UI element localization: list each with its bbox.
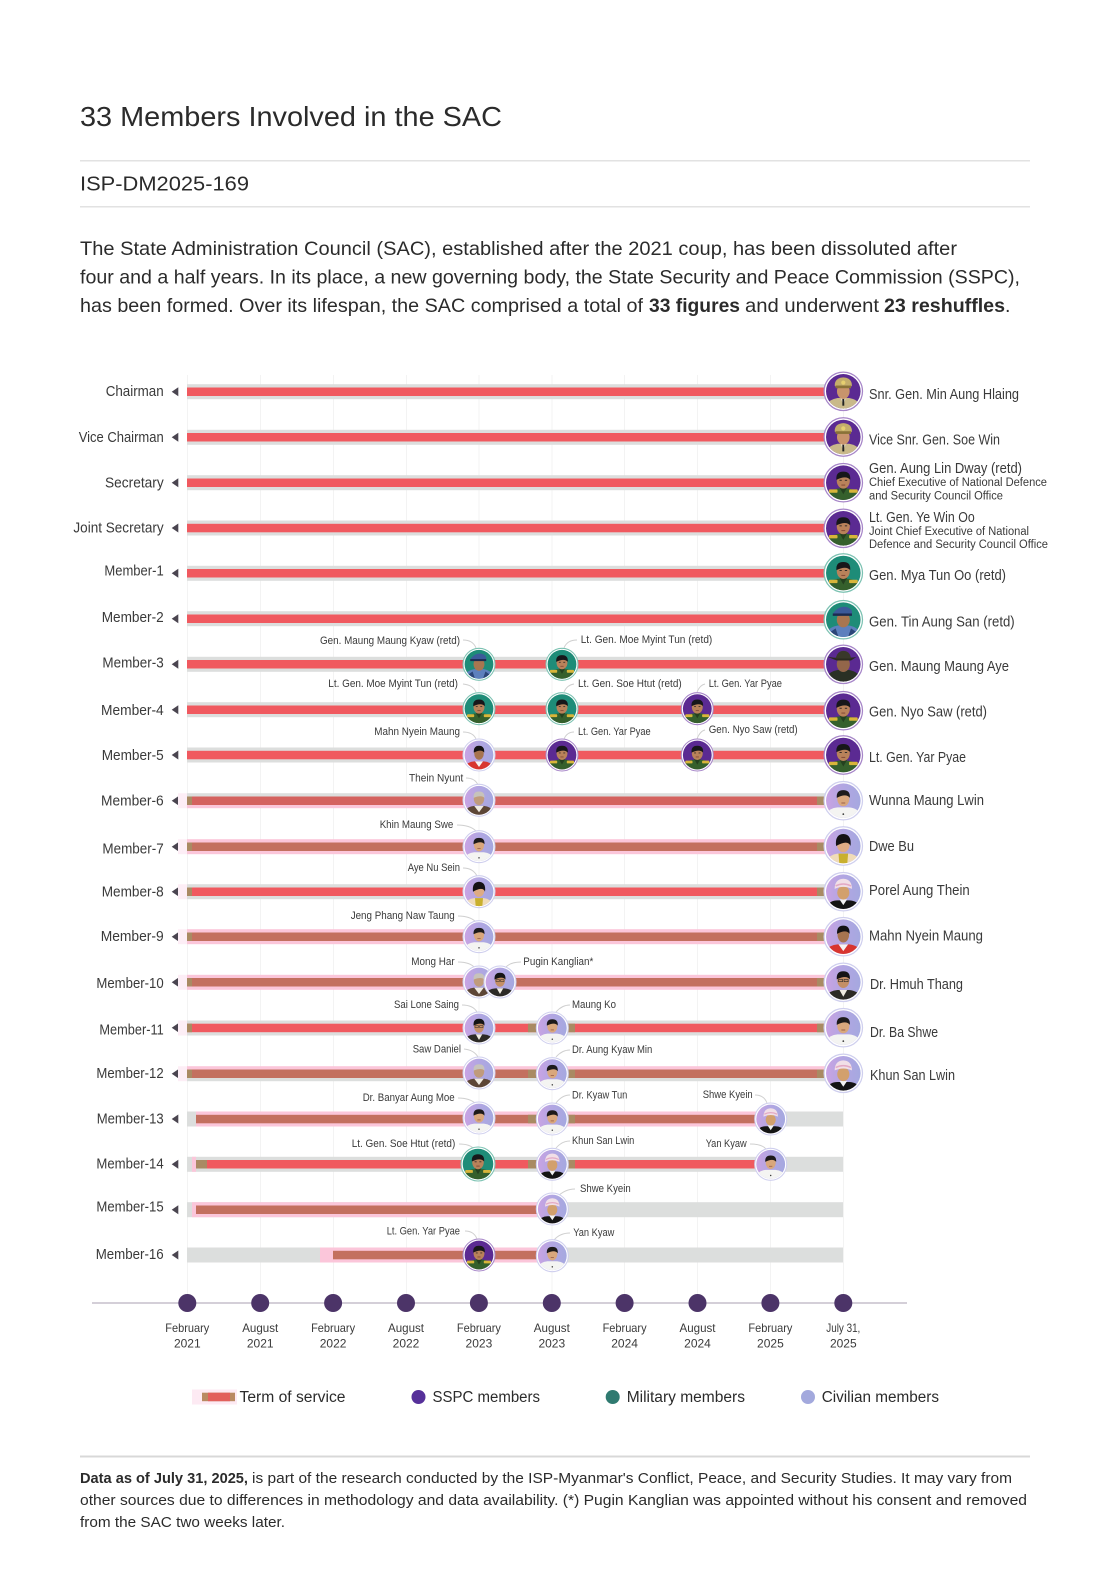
row: Member-14: Khun San Lwin xyxy=(572,1135,634,1147)
timeline axis: February xyxy=(165,1321,209,1335)
row: Member-9: Member-9 xyxy=(101,929,164,945)
portrait: Mya Tun Oo xyxy=(824,554,862,592)
row: Joint Secretary: Joint Secretary xyxy=(73,520,164,536)
row: Chairman: Chairman xyxy=(106,384,164,400)
row: Member-8 xyxy=(102,862,970,911)
portrait: Aung Kyaw Min xyxy=(536,1058,568,1090)
row: Member-13: Dr. Banyar Aung Moe xyxy=(363,1092,455,1104)
row: Joint Secretary xyxy=(73,509,1048,551)
intro paragraph: . xyxy=(1005,295,1010,317)
row: Member-7: Dwe Bu xyxy=(869,839,914,855)
portrait: Mahn Nyein Maung xyxy=(463,739,495,771)
row: Member-6: Wunna Maung Lwin xyxy=(869,793,984,809)
row: Member-5: Lt. Gen. Yar Pyae xyxy=(869,750,966,766)
row: Member-5: Gen. Nyo Saw (retd) xyxy=(709,724,798,736)
timeline axis: 2025 xyxy=(830,1336,857,1350)
row: Member-15: Member-15 xyxy=(96,1200,164,1216)
portrait: Saw Daniel xyxy=(463,1057,495,1089)
portrait: Soe Htut xyxy=(546,693,578,725)
row: Member-3 xyxy=(102,634,1009,684)
row: Secretary: Gen. Aung Lin Dway (retd) xyxy=(869,461,1022,477)
title: 33 Members Involved in the SAC xyxy=(80,101,502,132)
row: Member-6 xyxy=(101,772,984,820)
intro paragraph: has been formed. Over its lifespan, the SAC comprised a total of xyxy=(80,295,644,317)
portrait: Banyar Aung Moe xyxy=(463,1102,495,1134)
row: Member-14: Yan Kyaw xyxy=(706,1138,747,1150)
row: Member-12: Khun San Lwin xyxy=(870,1068,955,1084)
row: Member-16: Member-16 xyxy=(96,1247,164,1263)
portrait: Khin Maung Swe xyxy=(463,831,495,863)
timeline axis: August xyxy=(242,1321,279,1335)
timeline axis: August xyxy=(680,1321,716,1335)
row: Member-3: Gen. Maung Maung Aye xyxy=(869,659,1009,675)
intro paragraph: 23 reshuffles xyxy=(884,295,1005,317)
portrait: Mahn Nyein Maung xyxy=(824,918,862,956)
portrait: Porel Aung Thein xyxy=(824,872,862,911)
timeline axis: February xyxy=(748,1321,792,1335)
row: Member-13 xyxy=(97,1089,843,1135)
portrait: Yan Kyaw xyxy=(755,1148,787,1180)
legend xyxy=(192,1389,939,1406)
portrait: Maung Maung Kyaw xyxy=(463,648,495,680)
row: Member-11: Dr. Ba Shwe xyxy=(870,1025,938,1041)
row: Member-4 xyxy=(101,678,987,730)
row: Member-10 xyxy=(96,956,963,1002)
portrait: Ye Win Oo xyxy=(824,509,862,548)
row: Member-1: Gen. Mya Tun Oo (retd) xyxy=(869,568,1006,584)
row: Chairman xyxy=(106,372,1019,410)
row: Member-8: Aye Nu Sein xyxy=(408,862,460,874)
footnote xyxy=(80,1470,1027,1531)
portrait: Mong Har xyxy=(463,966,495,998)
row: Member-5: Lt. Gen. Yar Pyae xyxy=(578,726,651,738)
timeline axis: August xyxy=(388,1321,425,1335)
row: Member-7 xyxy=(102,819,914,865)
portrait: Thein Nyunt xyxy=(463,784,495,816)
portrait: Soe Win xyxy=(824,418,862,456)
row: Member-2 xyxy=(102,600,1015,639)
row: Joint Secretary: Lt. Gen. Ye Win Oo xyxy=(869,510,975,526)
row: Chairman: Snr. Gen. Min Aung Hlaing xyxy=(869,387,1019,403)
row: Member-15 xyxy=(96,1183,843,1225)
row: Vice Chairman: Vice Chairman xyxy=(79,430,164,446)
timeline axis: 2023 xyxy=(466,1336,493,1350)
row: Member-10: Dr. Hmuh Thang xyxy=(870,977,963,993)
row: Member-9: Mahn Nyein Maung xyxy=(869,928,983,944)
portrait: Yar Pyae xyxy=(463,1239,495,1271)
timeline axis: 2021 xyxy=(174,1336,201,1350)
row: Member-5: Mahn Nyein Maung xyxy=(374,726,460,738)
portrait: Tin Aung San xyxy=(824,600,862,639)
legend: Civilian members xyxy=(822,1389,939,1406)
row: Joint Secretary: Joint Chief Executive of National xyxy=(869,526,1029,538)
footnote: other sources due to differences in methodology and data availability. (*) Pugin Kanglian was appointed without his consent and removed xyxy=(80,1492,1027,1509)
row: Member-7: Khin Maung Swe xyxy=(380,819,453,831)
row: Member-8: Member-8 xyxy=(102,885,164,901)
portrait: Min Aung Hlaing xyxy=(824,372,862,410)
intro paragraph: four and a half years. In its place, a new governing body, the State Security and Peace Commission (SSPC), xyxy=(80,266,1020,288)
portrait: Wunna Maung Lwin xyxy=(824,782,862,820)
row: Member-9 xyxy=(101,910,983,956)
timeline axis: February xyxy=(311,1321,355,1335)
row: Member-4: Member-4 xyxy=(101,703,164,719)
report code: ISP-DM2025-169 xyxy=(80,172,249,196)
portrait: Maung Ko xyxy=(536,1012,568,1044)
row: Member-16: Lt. Gen. Yar Pyae xyxy=(387,1226,460,1238)
portrait: Yan Kyaw xyxy=(536,1240,568,1272)
row: Member-1 xyxy=(104,554,1006,592)
row: Secretary xyxy=(105,461,1047,502)
row: Member-10: Pugin Kanglian* xyxy=(523,956,594,968)
row: Member-3: Lt. Gen. Moe Myint Tun (retd) xyxy=(581,634,712,646)
row: Member-16 xyxy=(96,1226,843,1272)
portrait: Maung Maung Aye xyxy=(824,645,862,684)
row: Member-11: Member-11 xyxy=(99,1022,164,1038)
footnote: Data as of July 31, 2025, xyxy=(80,1470,248,1487)
row: Member-13: Dr. Kyaw Tun xyxy=(572,1090,627,1102)
timeline axis: 2022 xyxy=(320,1336,347,1350)
row: Member-4: Lt. Gen. Yar Pyae xyxy=(709,678,782,690)
row: Joint Secretary: Defence and Security Council Office xyxy=(869,539,1048,551)
intro paragraph: 33 figures xyxy=(649,295,740,317)
row: Member-6: Thein Nyunt xyxy=(409,772,463,784)
row: Member-2: Gen. Tin Aung San (retd) xyxy=(869,614,1015,630)
row: Member-9: Jeng Phang Naw Taung xyxy=(351,910,455,922)
timeline axis: 2022 xyxy=(393,1336,420,1350)
portrait: Shwe Kyein xyxy=(755,1103,787,1135)
row: Member-12 xyxy=(96,1044,955,1092)
timeline axis: 2021 xyxy=(247,1336,274,1350)
row: Member-11: Maung Ko xyxy=(572,999,616,1011)
timeline axis xyxy=(92,1294,907,1350)
row: Member-11: Sai Lone Saing xyxy=(394,999,459,1011)
row: Member-4: Lt. Gen. Soe Htut (retd) xyxy=(578,678,682,690)
row: Member-12: Member-12 xyxy=(96,1066,164,1082)
row: Member-4: Gen. Nyo Saw (retd) xyxy=(869,704,987,720)
row: Member-7: Member-7 xyxy=(102,841,164,857)
portrait: Kyaw Tun xyxy=(536,1103,568,1135)
timeline axis: February xyxy=(603,1321,647,1335)
row: Vice Chairman: Vice Snr. Gen. Soe Win xyxy=(869,432,1000,448)
portrait: Jeng Phang Naw Taung xyxy=(463,921,495,953)
intro paragraph: and underwent xyxy=(745,295,880,317)
row: Secretary: Secretary xyxy=(105,476,164,492)
row: Member-5: Member-5 xyxy=(102,748,164,764)
row: Member-1: Member-1 xyxy=(104,564,164,580)
timeline axis: 2024 xyxy=(611,1336,638,1350)
row: Member-13: Shwe Kyein xyxy=(703,1089,753,1101)
row: Member-13: Member-13 xyxy=(97,1111,164,1127)
portrait: Aye Nu Sein xyxy=(463,876,495,908)
portrait: Shwe Kyein xyxy=(536,1193,568,1225)
row: Member-3: Gen. Maung Maung Kyaw (retd) xyxy=(320,635,460,647)
row: Member-6: Member-6 xyxy=(101,794,164,810)
row: Member-2: Member-2 xyxy=(102,610,164,626)
row: Member-14: Member-14 xyxy=(96,1157,164,1173)
portrait: Aung Lin Dway xyxy=(824,464,862,502)
intro paragraph: The State Administration Council (SAC), established after the 2021 coup, has been dissoluted after xyxy=(80,238,958,260)
portrait: Nyo Saw xyxy=(824,692,862,730)
portrait: Nyo Saw xyxy=(681,739,713,771)
row: Secretary: and Security Council Office xyxy=(869,490,1003,502)
row: Member-3: Member-3 xyxy=(102,656,164,672)
legend: Military members xyxy=(627,1389,745,1406)
row: Member-11 xyxy=(99,999,938,1047)
portrait: Khun San Lwin xyxy=(824,1054,862,1092)
portrait: Pugin Kanglian xyxy=(484,966,516,998)
portrait: Dwe Bu xyxy=(824,827,862,865)
intro paragraph xyxy=(80,238,1020,317)
timeline axis: July 31, xyxy=(826,1321,860,1335)
row: Member-4: Lt. Gen. Moe Myint Tun (retd) xyxy=(328,678,458,690)
portrait: Hmuh Thang xyxy=(824,963,862,1002)
timeline axis: February xyxy=(457,1321,501,1335)
portrait: Khun San Lwin xyxy=(536,1148,568,1180)
timeline axis: 2023 xyxy=(538,1336,565,1350)
legend: SSPC members xyxy=(432,1389,540,1406)
timeline axis: 2024 xyxy=(684,1336,711,1350)
portrait: Moe Myint Tun xyxy=(463,693,495,725)
row: Member-10: Member-10 xyxy=(96,976,164,992)
row: Member-12: Dr. Aung Kyaw Min xyxy=(572,1044,652,1056)
row: Member-14: Lt. Gen. Soe Htut (retd) xyxy=(352,1138,455,1150)
footnote: from the SAC two weeks later. xyxy=(80,1514,285,1531)
row: Member-16: Yan Kyaw xyxy=(573,1227,614,1239)
row: Member-10: Mong Har xyxy=(411,956,455,968)
legend: Term of service xyxy=(240,1389,346,1406)
row: Vice Chairman xyxy=(79,418,1000,456)
row: Member-15: Shwe Kyein xyxy=(580,1183,631,1195)
row: Member-5 xyxy=(102,724,966,774)
row: Member-8: Porel Aung Thein xyxy=(869,883,970,899)
portrait: Yar Pyae xyxy=(546,739,578,771)
portrait: Soe Htut xyxy=(461,1147,495,1181)
row: Member-12: Saw Daniel xyxy=(413,1044,461,1056)
portrait: Yar Pyae current xyxy=(824,736,862,774)
row: Member-14 xyxy=(96,1135,843,1181)
timeline axis: August xyxy=(534,1321,570,1335)
portrait: Moe Myint Tun xyxy=(546,648,578,680)
portrait: Sai Lone Saing xyxy=(463,1012,495,1044)
portrait: Yar Pyae xyxy=(681,693,713,725)
timeline axis: 2025 xyxy=(757,1336,784,1350)
portrait: Ba Shwe xyxy=(824,1008,862,1047)
row: Secretary: Chief Executive of National Defence xyxy=(869,477,1047,489)
footnote: is part of the research conducted by the ISP-Myanmar's Conflict, Peace, and Security Studies. It may vary from xyxy=(252,1470,1012,1487)
